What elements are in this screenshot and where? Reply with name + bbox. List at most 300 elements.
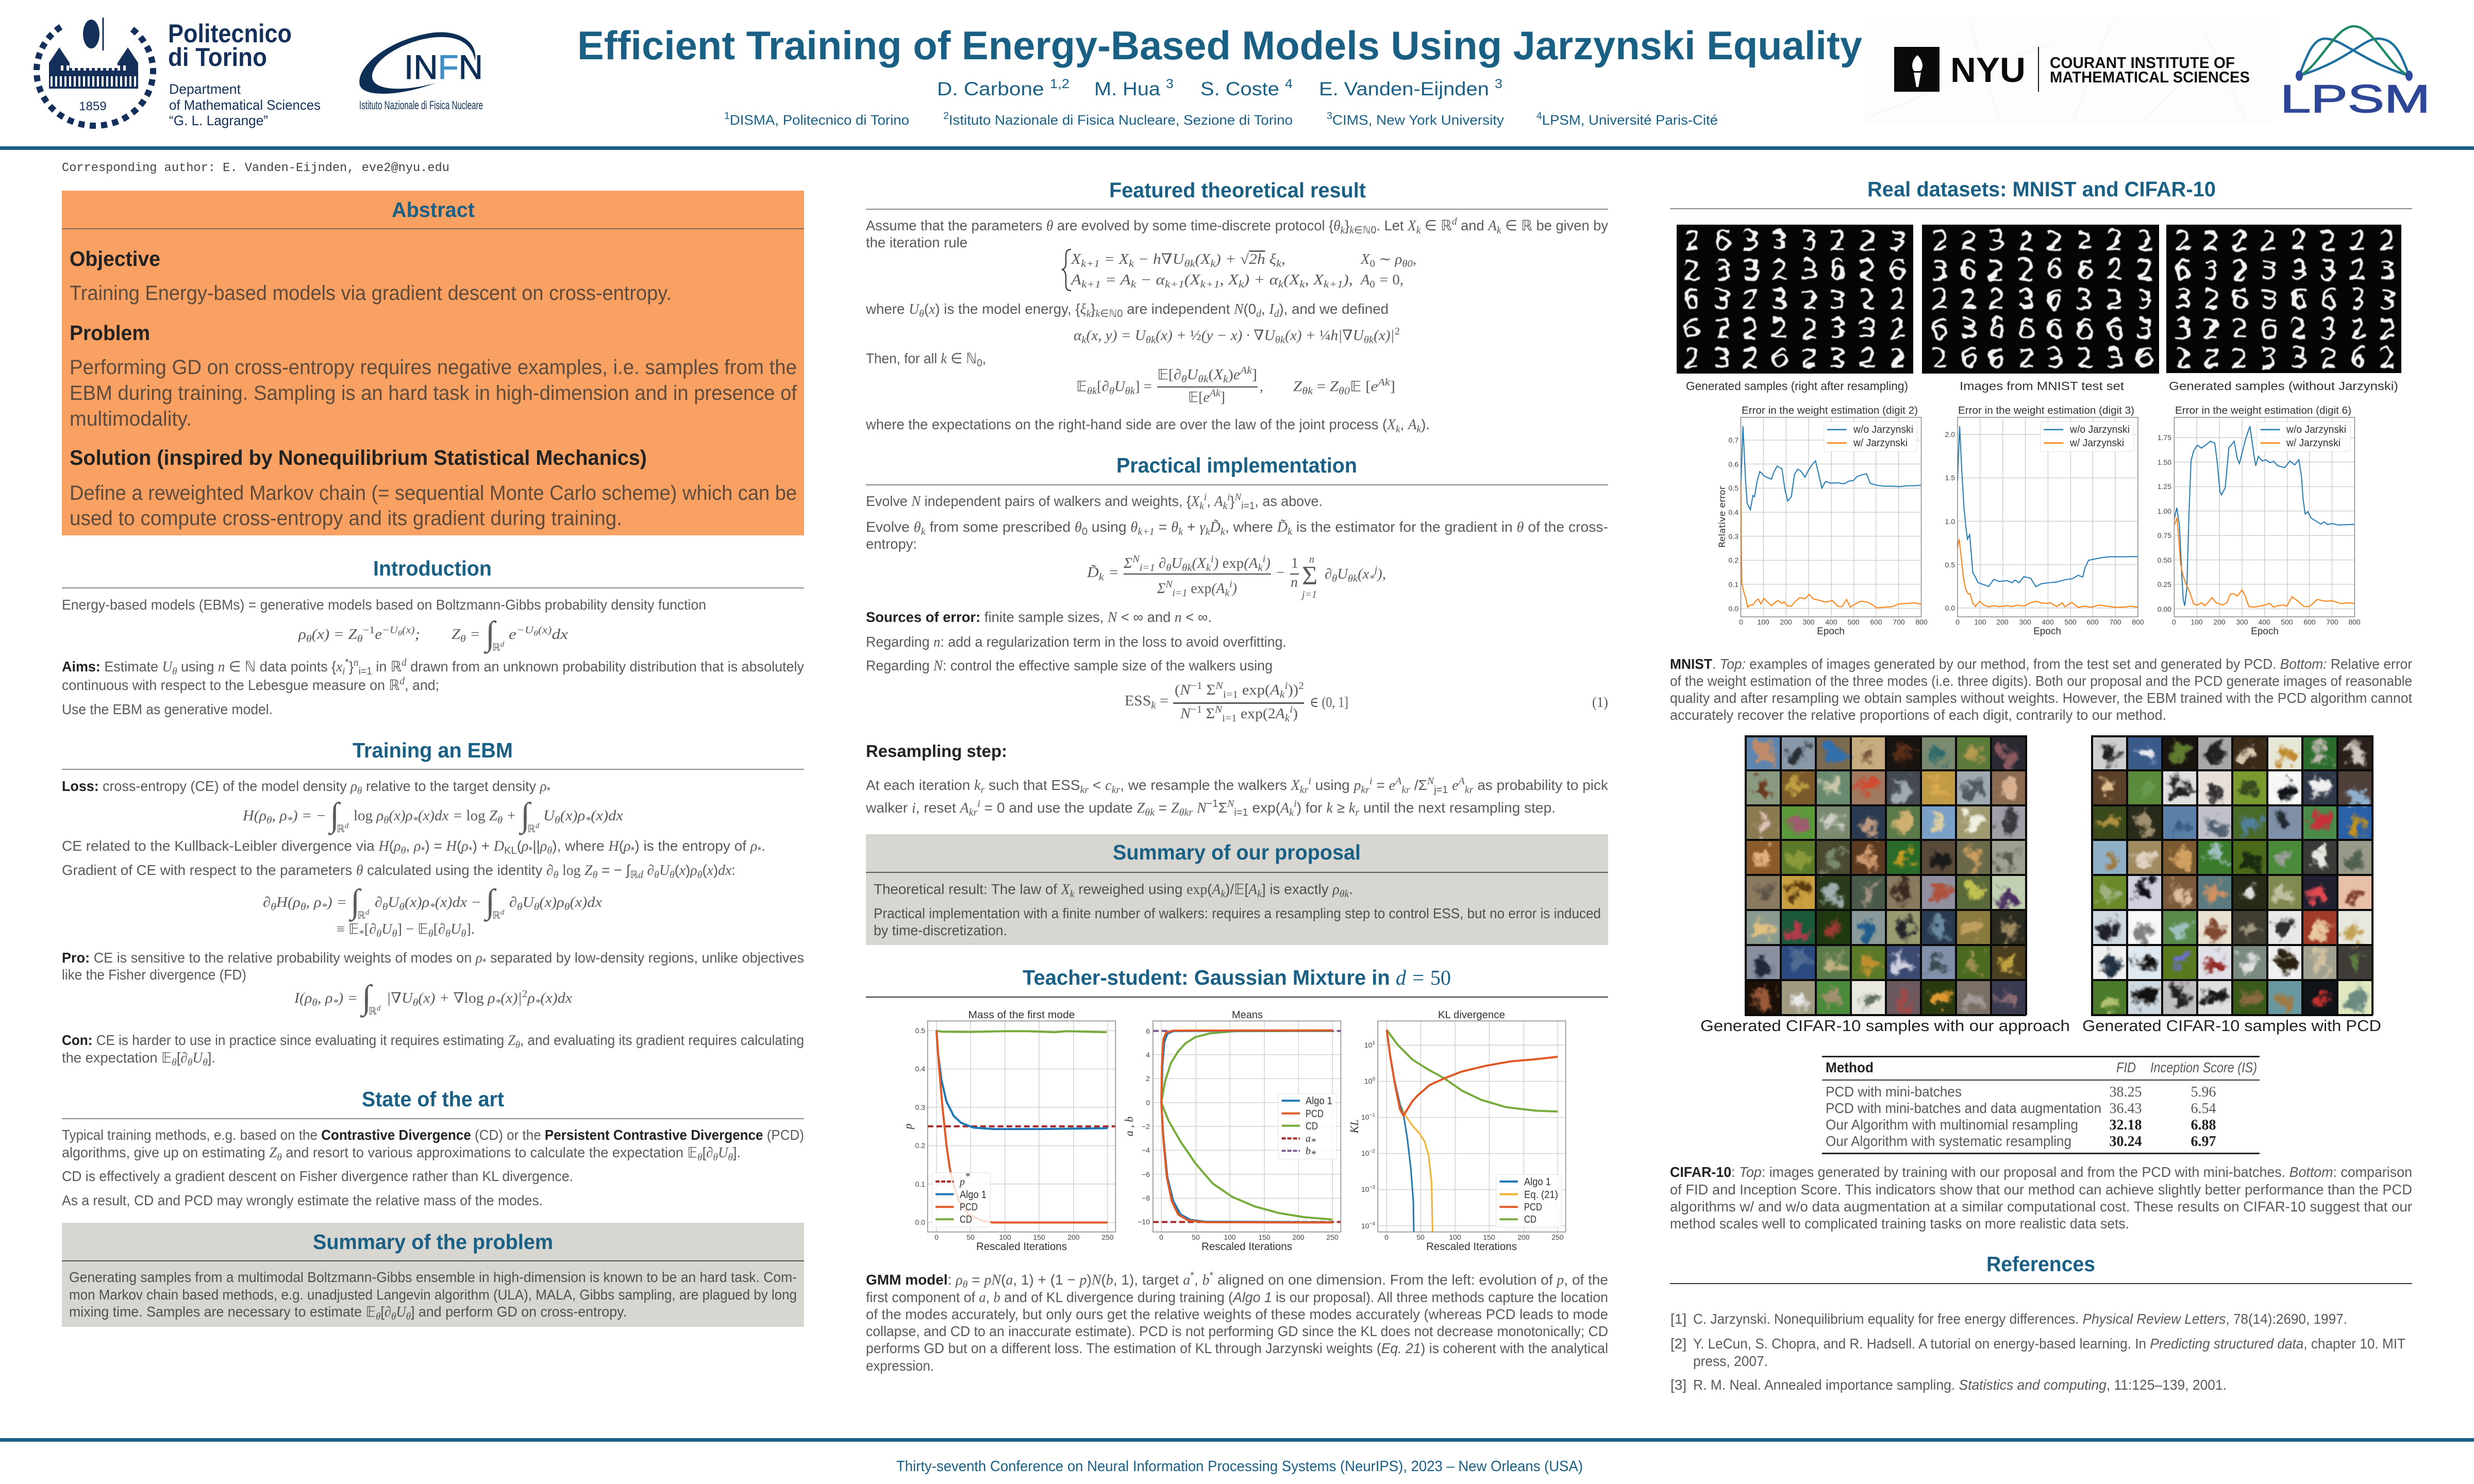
reference list: [3] <box>1670 1377 1686 1393</box>
table: FID and Inception Score: Inception Score (IS) <box>2150 1059 2257 1075</box>
equation: gradient estimator: ΣNi=1 ∂θUθk(Xki) exp(Aki) <box>1123 553 1271 574</box>
text: protocol assumption: the iteration rule <box>866 234 967 250</box>
authors: M. Hua 3 <box>1094 77 1174 99</box>
equation: gradient of CE: ≡ 𝔼*[∂θUθ] − 𝔼θ[∂θUθ]. <box>337 920 475 939</box>
affiliations: 3CIMS, New York University <box>1327 111 1505 128</box>
equation: cross-entropy: ℝd <box>527 822 540 835</box>
table: FID and Inception Score: 6.88 <box>2191 1117 2216 1133</box>
image grid: CIFAR-10 samples with PCD <box>2091 735 2373 1016</box>
panel: introduction <box>62 556 804 717</box>
reference list: [1] <box>1670 1311 1686 1327</box>
chart: error digit 3: 0 <box>1955 618 1960 626</box>
panel: real datasets <box>1670 177 2412 1232</box>
text: state of the art: CD is effectively a gradient descent on Fisher divergence rather than KL divergence. <box>62 1168 573 1184</box>
footer: Thirty-seventh Conference on Neural Information Processing Systems (NeurIPS), 2023 – New Orleans (USA) <box>896 1458 1583 1475</box>
affiliations: 1DISMA, Politecnico di Torino <box>724 111 909 128</box>
equation: Boltzmann-Gibbs density: Zθ = <box>452 627 480 645</box>
image grid: generated samples right after resampling: 23323626 <box>1683 255 1907 286</box>
equation: effective sample size <box>1125 680 1608 724</box>
table: FID and Inception Score: PCD with mini-batches and data augmentation <box>1826 1100 2101 1116</box>
chart: mass of the first mode: 100 <box>999 1233 1011 1241</box>
chart: KL divergence <box>1348 1009 1566 1253</box>
problem <box>70 321 797 430</box>
text: pro: Pro: CE is sensitive to the relative probability weights of modes on ρ* separated by low-density regions, unlike objectives <box>62 950 804 968</box>
text: summary of the problem: mon Markov chain based methods, e.g. unadjusted Langevin algorithm (ULA), MALA, Gibbs sampling, are plagued by long <box>69 1287 797 1303</box>
image grid: MNIST test set <box>1922 225 2159 374</box>
equation: gradient estimator: n <box>1309 554 1314 565</box>
authors: E. Vanden-Eijnden 3 <box>1319 77 1502 99</box>
text: CIFAR-10 description: algorithms w/ and w/o data augmentation at a similar computational cost. These results on CIFAR-10 suggest that our <box>1670 1199 2412 1215</box>
chart: error digit 2: 600 <box>1870 618 1882 626</box>
problem: Performing GD on cross-entropy requires negative examples, i.e. samples from the <box>70 356 797 379</box>
chart: error digit 3: 100 <box>1974 618 1986 626</box>
chart: means: −10 <box>1138 1218 1150 1226</box>
panel: practical implementation <box>865 453 1609 818</box>
objective: Objective <box>70 247 160 271</box>
table: FID and Inception Score: 5.96 <box>2191 1084 2216 1100</box>
equation: Fisher divergence: ∫ <box>360 979 373 1018</box>
chart: mass of the first mode: 0.1 <box>915 1180 925 1188</box>
logo: INFN: INFN <box>404 48 483 86</box>
text: sources of error: Sources of error: finite sample sizes, N < ∞ and n < ∞. <box>866 609 1212 626</box>
heading: abstract: Abstract <box>392 198 475 222</box>
text: protocol assumption <box>866 216 1608 250</box>
image grid: CIFAR-10 samples with our approach <box>1745 735 2026 1016</box>
chart: error digit 3: 0.5 <box>1945 561 1955 569</box>
text: aims <box>62 657 804 717</box>
reference list <box>1670 1311 2405 1393</box>
chart: mass of the first mode: Rescaled Iterations <box>976 1241 1067 1253</box>
objective: Training Energy-based models via gradient descent on cross-entropy. <box>70 282 672 305</box>
chart: mass of the first mode: 0.2 <box>915 1141 925 1150</box>
chart: means: 200 <box>1292 1233 1305 1241</box>
chart: error digit 3: Epoch <box>2033 626 2061 637</box>
panel: state of the art <box>62 1087 804 1208</box>
text: GMM model: collapse, and CD to an inaccurate estimate). PCD is not performing GD since the KL does not decrease monotonically; CD <box>866 1323 1608 1339</box>
heading: introduction: Introduction <box>373 556 492 580</box>
equation: gradient estimator: 1 <box>1291 555 1298 571</box>
solution: used to compute cross-entropy and its gradient during training. <box>70 507 622 530</box>
text: summary of the problem <box>69 1269 797 1322</box>
equation: cross-entropy: log ρθ(x)ρ*(x)dx = log Zθ + <box>354 808 516 826</box>
chart: KL divergence: Eq. (21) <box>1524 1189 1558 1201</box>
problem: multimodality. <box>70 408 192 430</box>
chart: means: PCD <box>1306 1108 1324 1120</box>
equation: Fisher divergence: ℝd <box>369 1004 381 1017</box>
logo: Politecnico di Torino: “G. L. Lagrange” <box>169 113 268 128</box>
text: aims: Use the EBM as generative model. <box>62 701 273 717</box>
chart: error digit 6: 0.50 <box>2158 556 2171 564</box>
chart: means <box>1123 1009 1341 1253</box>
text: con: the expectation 𝔼θ[∂θUθ]. <box>62 1049 215 1068</box>
chart: error digit 3: 600 <box>2086 618 2099 626</box>
equation: gradient of CE: ∫ <box>348 883 362 922</box>
equation: alpha: αk(x, y) = Uθk(x) + ½(y − x) · ∇U θk(x) + ¼h|∇Uθk(x)|2 <box>1074 326 1400 346</box>
chart: KL divergence: 10−3 <box>1361 1185 1375 1193</box>
chart: error digit 6: w/ Jarzynski <box>2286 437 2341 449</box>
chart: KL divergence: 0 <box>1384 1233 1389 1241</box>
equation: gradient of CE: ∂θUθ(x)ρ*(x)dx − <box>375 895 481 913</box>
chart: mass of the first mode: 0.0 <box>915 1218 925 1226</box>
logo: Politecnico di Torino: Department <box>169 81 241 97</box>
chart: error digit 2: Relative error <box>1717 486 1728 548</box>
chart: error digit 2: 0.5 <box>1729 484 1739 492</box>
text: sources of error: Regarding N: control the effective sample size of the walkers using <box>866 657 1273 674</box>
image grid: generated samples right after resampling <box>1677 225 1913 374</box>
chart: means: −2 <box>1142 1122 1150 1131</box>
logo: LPSM: LPSM <box>2280 77 2430 121</box>
equation: gradient of CE: ∫ <box>483 883 497 922</box>
chart: means: 4 <box>1146 1051 1150 1059</box>
chart: mass of the first mode: 150 <box>1033 1233 1045 1241</box>
chart: error digit 2: w/ Jarzynski <box>1853 437 1908 449</box>
reference list: [2] <box>1670 1336 1686 1352</box>
chart: error digit 3: w/ Jarzynski <box>2069 437 2124 449</box>
panel: training an EBM <box>62 738 804 1068</box>
table: FID and Inception Score: 38.25 <box>2109 1084 2142 1100</box>
text: KL relation and gradient: CE related to the Kullback-Leibler divergence via H(ρθ, ρ*) = H(ρ*) + DKL(ρ*||ρθ), where H(ρ*) is the entropy of ρ*. <box>62 838 765 856</box>
equation: gradient of CE: ∂θH(ρθ, ρ*) = <box>263 895 347 913</box>
chart: error digit 2: 400 <box>1825 618 1837 626</box>
chart: means: −6 <box>1142 1170 1150 1178</box>
image grid: generated samples right after resampling: 63232322 <box>1683 284 1907 315</box>
chart: means: Means <box>1232 1009 1263 1021</box>
image grid: generated samples right after resampling: 23262322 <box>1683 343 1907 374</box>
logo: INFN: Istituto Nazionale di Fisica Nucleare <box>359 98 483 112</box>
chart: error digit 2: 0.4 <box>1729 508 1739 516</box>
chart: error digit 6: 100 <box>2191 618 2203 626</box>
chart: error digit 3: Error in the weight estimation (digit 3) <box>1958 405 2134 416</box>
equation: cross-entropy: ℝd <box>337 822 349 835</box>
corresponding author: Corresponding author: E. Vanden-Eijnden, eve2@nyu.edu <box>62 161 449 175</box>
chart: error digit 3: 300 <box>2019 618 2031 626</box>
affiliations: 2Istituto Nazionale di Fisica Nucleare, Sezione di Torino <box>943 111 1293 128</box>
table: FID and Inception Score: 6.54 <box>2191 1101 2216 1117</box>
chart: error digit 2: 200 <box>1780 618 1792 626</box>
chart: error digit 6: 600 <box>2303 618 2316 626</box>
authors <box>937 77 1502 99</box>
chart: means: 0 <box>1159 1233 1163 1241</box>
chart: error digit 3: 400 <box>2042 618 2054 626</box>
chart: error digit 2: 0.7 <box>1729 436 1739 444</box>
equation: expectation identity: 𝔼θk[∂θUθk] = <box>1076 378 1152 397</box>
chart: error digit 3 <box>1945 405 2144 637</box>
problem: EBM during training. Sampling is an hard task in high-dimension and in presence of <box>70 382 797 404</box>
panel: teacher-student Gaussian mixture <box>866 966 1608 1374</box>
chart: means: b* <box>1306 1145 1316 1160</box>
chart: means: 0 <box>1146 1099 1150 1107</box>
chart: error digit 3: 1.5 <box>1945 474 1955 482</box>
equation: expectation identity: 𝔼[eAk] <box>1188 387 1225 406</box>
chart: error digit 6: 200 <box>2213 618 2226 626</box>
table: FID and Inception Score: 30.24 <box>2109 1134 2142 1150</box>
equation: gradient of CE: ℝd <box>357 908 370 921</box>
chart: error digit 6: 1.25 <box>2158 482 2171 491</box>
chart: KL divergence: Rescaled Iterations <box>1426 1241 1517 1253</box>
chart: KL divergence: 10−2 <box>1361 1149 1375 1157</box>
heading: state of the art: State of the art <box>362 1087 504 1111</box>
equation: effective sample size: (N−1 ΣNi=1 exp(Aki))2 <box>1175 680 1304 700</box>
chart: error digit 3: 0.0 <box>1945 604 1955 612</box>
panel: summary of the problem <box>62 1223 804 1327</box>
authors: D. Carbone 1,2 <box>937 77 1069 99</box>
equation: iteration rule: Xk+1 = X k − h∇U θk(Xk) + √ 2h ξk, <box>1071 251 1285 269</box>
image grid: MNIST test set: 22236323 <box>1931 284 2153 315</box>
chart: KL divergence: CD <box>1524 1214 1536 1225</box>
text: summary of the problem: mixing time. Samples are necessary to estimate 𝔼θ[∂θUθ] and perform GD on cross-entropy. <box>69 1303 627 1322</box>
text: evolve walkers <box>866 492 1608 552</box>
chart: error digit 3: w/o Jarzynski <box>2069 424 2130 435</box>
affiliations: 4LPSM, Université Paris-Cité <box>1536 111 1718 128</box>
table: FID and Inception Score: PCD with mini-batches <box>1826 1084 1962 1100</box>
image grid: generated samples without Jarzynski: 32262322 <box>2175 314 2396 345</box>
reference list: Y. LeCun, S. Chopra, and R. Hadsell. A tutorial on energy-based learning. In Predicting structured data, chapter 10. MIT <box>1693 1336 2405 1352</box>
text: evolve walkers: Evolve N independent pairs of walkers and weights, {Xki, Aki}Ni=1, as above. <box>866 492 1323 512</box>
table: FID and Inception Score <box>1822 1056 2260 1154</box>
heading: featured theoretical result: Featured theoretical result <box>1109 178 1366 202</box>
chart: KL divergence: 10−1 <box>1361 1112 1375 1121</box>
chart: mass of the first mode: PCD <box>960 1202 978 1213</box>
equation: effective sample size: ESSk = <box>1125 693 1168 711</box>
image grid: MNIST test set: 26623236 <box>1931 343 2153 374</box>
panel: summary of our proposal <box>866 834 1608 945</box>
equation: Boltzmann-Gibbs density: ρθ(x) = Z θ−1e−Uθ(x); <box>298 625 420 645</box>
image grid: generated samples without Jarzynski: 22233262 <box>2175 343 2396 374</box>
image grid: generated samples right after resampling: 62222332 <box>1683 314 1907 345</box>
authors: S. Coste 4 <box>1200 77 1293 99</box>
text: summary of the problem: Generating samples from a multimodal Boltzmann-Gibbs ensemble in high-dimension is known to be an hard task. Com- <box>69 1269 797 1285</box>
chart: error digit 6 <box>2158 405 2361 637</box>
chart: error digit 6: 0.25 <box>2158 580 2171 588</box>
image grid: MNIST test set: 36226622 <box>1931 255 2153 286</box>
text: resampling step: At each iteration kr such that ESSkr < ckr, we resample the walkers Xkri using pkri = eAkr /ΣNj=1 eAkr as probability to pick <box>866 775 1609 796</box>
text: model energy: where Uθ(x) is the model energy, {ξk}k∈ℕ0 are independent N(0d, Id), and we defined <box>865 301 1389 319</box>
chart: means: 100 <box>1224 1233 1236 1241</box>
text: summary of our proposal <box>874 881 1601 938</box>
logo: Politecnico di Torino: di Torino <box>168 43 267 72</box>
chart: KL divergence: 101 <box>1364 1040 1375 1049</box>
text: KL relation and gradient <box>62 838 765 881</box>
equation: cross-entropy: H(ρθ, ρ*) = − <box>242 808 326 826</box>
panel: featured theoretical result <box>865 178 1608 435</box>
text: resampling step: walker i, reset Akri = 0 and use the update Zθk = Zθkr N−1ΣNi=1 exp(Aki) for k ≥ kr until the next resampling step. <box>865 798 1556 818</box>
equation: cross-entropy: ∫ <box>328 796 341 835</box>
logo: Politecnico di Torino <box>37 18 321 128</box>
heading: teacher-student: Teacher-student: Gaussian Mixture in d = 50 <box>1023 966 1451 989</box>
affiliations <box>724 111 1718 128</box>
chart: means: 2 <box>1146 1074 1150 1083</box>
text: pro: like the Fisher divergence (FD) <box>62 967 246 983</box>
equation: iteration rule: Ak+1 = A k − α k+1(Xk+1, X k) + α k(Xk, X k+1), <box>1070 272 1353 290</box>
text: state of the art <box>62 1127 804 1208</box>
chart: error digit 6: Error in the weight estimation (digit 6) <box>2175 405 2351 416</box>
chart: mass of the first mode: 0.4 <box>915 1065 925 1073</box>
chart: error digit 6: 1.50 <box>2158 458 2171 466</box>
chart: mass of the first mode: 0.5 <box>915 1026 925 1035</box>
equation: effective sample size: ∈ (0, 1] <box>1310 695 1348 711</box>
logo: NYU Courant <box>1864 16 2272 123</box>
chart: error digit 2: 0.2 <box>1729 556 1739 564</box>
text: con: Con: CE is harder to use in practice since evaluating it requires estimating Zθ, and evaluating its gradient requires calculating <box>62 1032 804 1051</box>
chart: mass of the first mode: 0 <box>934 1233 939 1241</box>
chart: error digit 6: 1.75 <box>2158 433 2171 442</box>
image grid: generated samples right after resampling: 26333223 <box>1683 226 1907 257</box>
reference list: press, 2007. <box>1693 1353 1768 1369</box>
chart: KL divergence: KL <box>1348 1120 1361 1134</box>
title: Efficient Training of Energy-Based Models Using Jarzynski Equality <box>577 23 1862 68</box>
text: summary of our proposal: by time-discretization. <box>874 922 1007 938</box>
equation: expectation identity: 𝔼[∂θUθk(Xk)eAk] <box>1157 365 1257 385</box>
equation: expectation identity <box>1076 365 1395 406</box>
equation: Boltzmann-Gibbs density: ∫ <box>483 615 497 654</box>
equation: gradient of CE: ∂θUθ(x)ρθ(x)dx <box>509 895 603 913</box>
heading: summary of our proposal: Summary of our proposal <box>1113 840 1361 864</box>
table: FID and Inception Score: Method <box>1826 1059 1874 1075</box>
logo: Politecnico di Torino: 1859 <box>79 99 107 113</box>
text: state of the art: As a result, CD and PCD may wrongly estimate the relative mass of the modes. <box>62 1192 543 1208</box>
chart: mass of the first mode: 250 <box>1101 1233 1114 1241</box>
chart: KL divergence: Algo 1 <box>1524 1176 1551 1188</box>
chart: error digit 2: 0.1 <box>1729 580 1739 588</box>
text: then for all k: Then, for all k ∈ ℕ0, <box>866 350 986 369</box>
equation: Fisher divergence: |∇Uθ(x) + ∇log ρ*(x)|2ρ*(x)dx <box>387 988 573 1008</box>
chart: mass of the first mode: 0.3 <box>915 1103 925 1111</box>
image grid: generated samples without Jarzynski: 63233323 <box>2175 255 2396 286</box>
chart: means: 150 <box>1258 1233 1271 1241</box>
text: MNIST description: accurately recover the relative proportions of each digit, contrarily to our method. <box>1670 707 2166 723</box>
text: summary of our proposal: Theoretical result: The law of Xk reweighed using exp(Ak)/𝔼[Ak] is exactly ρθk. <box>874 881 1353 900</box>
captions: MNIST grids: Generated samples (without Jarzynski) <box>2169 379 2398 393</box>
table: FID and Inception Score: 32.18 <box>2109 1117 2142 1133</box>
chart: KL divergence: 50 <box>1416 1233 1425 1241</box>
chart: means: −8 <box>1142 1194 1150 1202</box>
equation: Fisher divergence: I(ρθ, ρ*) = <box>294 990 358 1008</box>
text: CIFAR-10 description: method scales well to complicated training tasks on more realistic data sets. <box>1670 1216 2129 1232</box>
chart: error digit 2: w/o Jarzynski <box>1853 424 1913 435</box>
equation: gradient of CE <box>263 883 603 939</box>
chart: mass of the first mode: 200 <box>1067 1233 1080 1241</box>
captions: CIFAR-10 grids <box>1700 1017 2381 1035</box>
equation: cross-entropy <box>242 796 624 835</box>
chart: mass of the first mode: CD <box>960 1214 972 1225</box>
chart: means: −4 <box>1142 1146 1150 1154</box>
chart: error digit 6: 0.75 <box>2158 531 2171 539</box>
chart: means: CD <box>1306 1121 1318 1132</box>
equation: gradient of CE: ℝd <box>492 908 505 921</box>
equation: gradient estimator: n <box>1291 575 1298 591</box>
chart: error digit 6: 0 <box>2172 618 2176 626</box>
equation: Boltzmann-Gibbs density: e−U θ(x)dx <box>509 625 569 643</box>
text: sources of error <box>866 609 1286 674</box>
chart: mass of the first mode: p <box>901 1123 914 1131</box>
text: GMM model: GMM model: ρθ = pN(a, 1) + (1 − p)N(b, 1), target a*, b* aligned on one dimension. From the left: evolution of p, of the <box>866 1270 1608 1290</box>
chart: KL divergence: KL divergence <box>1438 1009 1505 1021</box>
text: GMM model <box>866 1270 1608 1374</box>
heading: summary of the problem: Summary of the problem <box>313 1230 553 1254</box>
image grid: MNIST test set: 22322222 <box>1931 226 2153 257</box>
chart: KL divergence: 250 <box>1551 1233 1564 1241</box>
logo: NYU Courant: NYU <box>1950 50 2026 90</box>
chart: error digit 6: 400 <box>2258 618 2270 626</box>
heading: real datasets: Real datasets: MNIST and CIFAR-10 <box>1867 177 2216 201</box>
text: summary of our proposal: Practical implementation with a finite number of walkers: requires a resampling step to control ESS, but no error is induced <box>874 905 1601 921</box>
equation: gradient estimator: ∂θUθk(x*j), <box>1325 564 1386 584</box>
chart: error digit 2 <box>1717 405 1928 637</box>
equation: iteration rule: A0 = 0, <box>1360 272 1403 290</box>
panel: references <box>1670 1252 2412 1393</box>
text: joint process: where the expectations on the right-hand side are over the law of the joint process (Xk, Ak). <box>865 416 1430 435</box>
chart: error digit 6: 700 <box>2326 618 2338 626</box>
chart: means: a , b <box>1123 1117 1135 1136</box>
chart: KL divergence: 200 <box>1517 1233 1530 1241</box>
text: GMM model: expression. <box>866 1358 934 1374</box>
chart: error digit 2: 800 <box>1915 618 1928 626</box>
text: con <box>62 1032 804 1068</box>
text: MNIST description: MNIST. Top: examples of images generated by our method, from the test set and generated by PCD. Bottom: Relative error <box>1670 656 2412 672</box>
equation: cross-entropy: Uθ(x)ρ*(x)dx <box>543 808 624 826</box>
logo: Politecnico di Torino: Politecnico <box>168 19 292 48</box>
chart: KL divergence: 100 <box>1364 1076 1375 1085</box>
table: FID and Inception Score: Our Algorithm with multinomial resampling <box>1826 1117 2078 1133</box>
solution: Solution (inspired by Nonequilibrium Statistical Mechanics) <box>70 446 647 469</box>
text: MNIST description: of the weight estimation of the three modes (i.e. three digits). Both our proposal and the PCD generate images of reasonable <box>1670 673 2412 689</box>
equation: cross-entropy: ∫ <box>519 796 532 835</box>
chart: error digit 3: 1.0 <box>1945 517 1955 526</box>
text: CIFAR-10 description <box>1670 1164 2412 1232</box>
table: FID and Inception Score: 6.97 <box>2191 1134 2216 1150</box>
text: EBM definition: Energy-based models (EBMs) = generative models based on Boltzmann-Gibbs probability density function <box>62 597 706 613</box>
chart: means: a* <box>1306 1133 1316 1148</box>
chart: error digit 6: 500 <box>2281 618 2293 626</box>
logo: NYU Courant: COURANT INSTITUTE OF <box>2050 54 2235 72</box>
chart: error digit 3: 200 <box>1996 618 2009 626</box>
chart: error digit 2: 300 <box>1802 618 1815 626</box>
solution <box>70 446 797 530</box>
captions: CIFAR-10 grids: Generated CIFAR-10 samples with PCD <box>2082 1017 2381 1035</box>
chart: error digit 2: 700 <box>1893 618 1905 626</box>
chart: error digit 2: 500 <box>1847 618 1860 626</box>
chart: error digit 6: 0.00 <box>2158 605 2171 613</box>
image grid: generated samples without Jarzynski <box>2166 225 2401 374</box>
chart: error digit 3: 500 <box>2064 618 2077 626</box>
chart: KL divergence: 150 <box>1483 1233 1495 1241</box>
chart: means: Rescaled Iterations <box>1201 1241 1292 1253</box>
image grid: generated samples without Jarzynski: 22222222 <box>2175 226 2396 257</box>
chart: means: 250 <box>1326 1233 1339 1241</box>
reference list: C. Jarzynski. Nonequilibrium equality for free energy differences. Physical Review Letters, 78(14):2690, 1997. <box>1693 1311 2347 1327</box>
text: loss: Loss: cross-entropy (CE) of the model density ρθ relative to the target density ρ* <box>62 778 550 797</box>
problem: Problem <box>70 321 150 345</box>
equation: expectation identity: , <box>1260 379 1263 395</box>
solution: Define a reweighted Markov chain (= sequential Monte Carlo scheme) which can be <box>70 482 797 504</box>
chart: error digit 2: Epoch <box>1817 626 1845 637</box>
equation: effective sample size: N−1 ΣNi=1 exp(2Aki) <box>1180 704 1298 724</box>
chart: KL divergence: PCD <box>1524 1202 1542 1213</box>
table: FID and Inception Score: Our Algorithm with systematic resampling <box>1826 1133 2071 1149</box>
table: FID and Inception Score: 36.43 <box>2109 1101 2142 1117</box>
text: CIFAR-10 description: CIFAR-10: Top: images generated by training with our proposal and from the PCD with mini-batches. Bottom: comparison <box>1670 1164 2412 1180</box>
equation: gradient estimator: ΣNi=1 exp(Aki) <box>1157 579 1237 599</box>
captions: CIFAR-10 grids: Generated CIFAR-10 samples with our approach <box>1700 1017 2070 1035</box>
chart: error digit 3: 2.0 <box>1945 430 1955 439</box>
logo: LPSM <box>2280 26 2430 121</box>
chart: error digit 2: 0.0 <box>1729 604 1739 613</box>
captions: MNIST grids: Images from MNIST test set <box>1960 379 2125 393</box>
text: evolve walkers: entropy: <box>866 536 917 552</box>
logo: INFN <box>359 32 483 112</box>
text: resampling step <box>865 775 1609 818</box>
captions: MNIST grids <box>1686 379 2398 393</box>
